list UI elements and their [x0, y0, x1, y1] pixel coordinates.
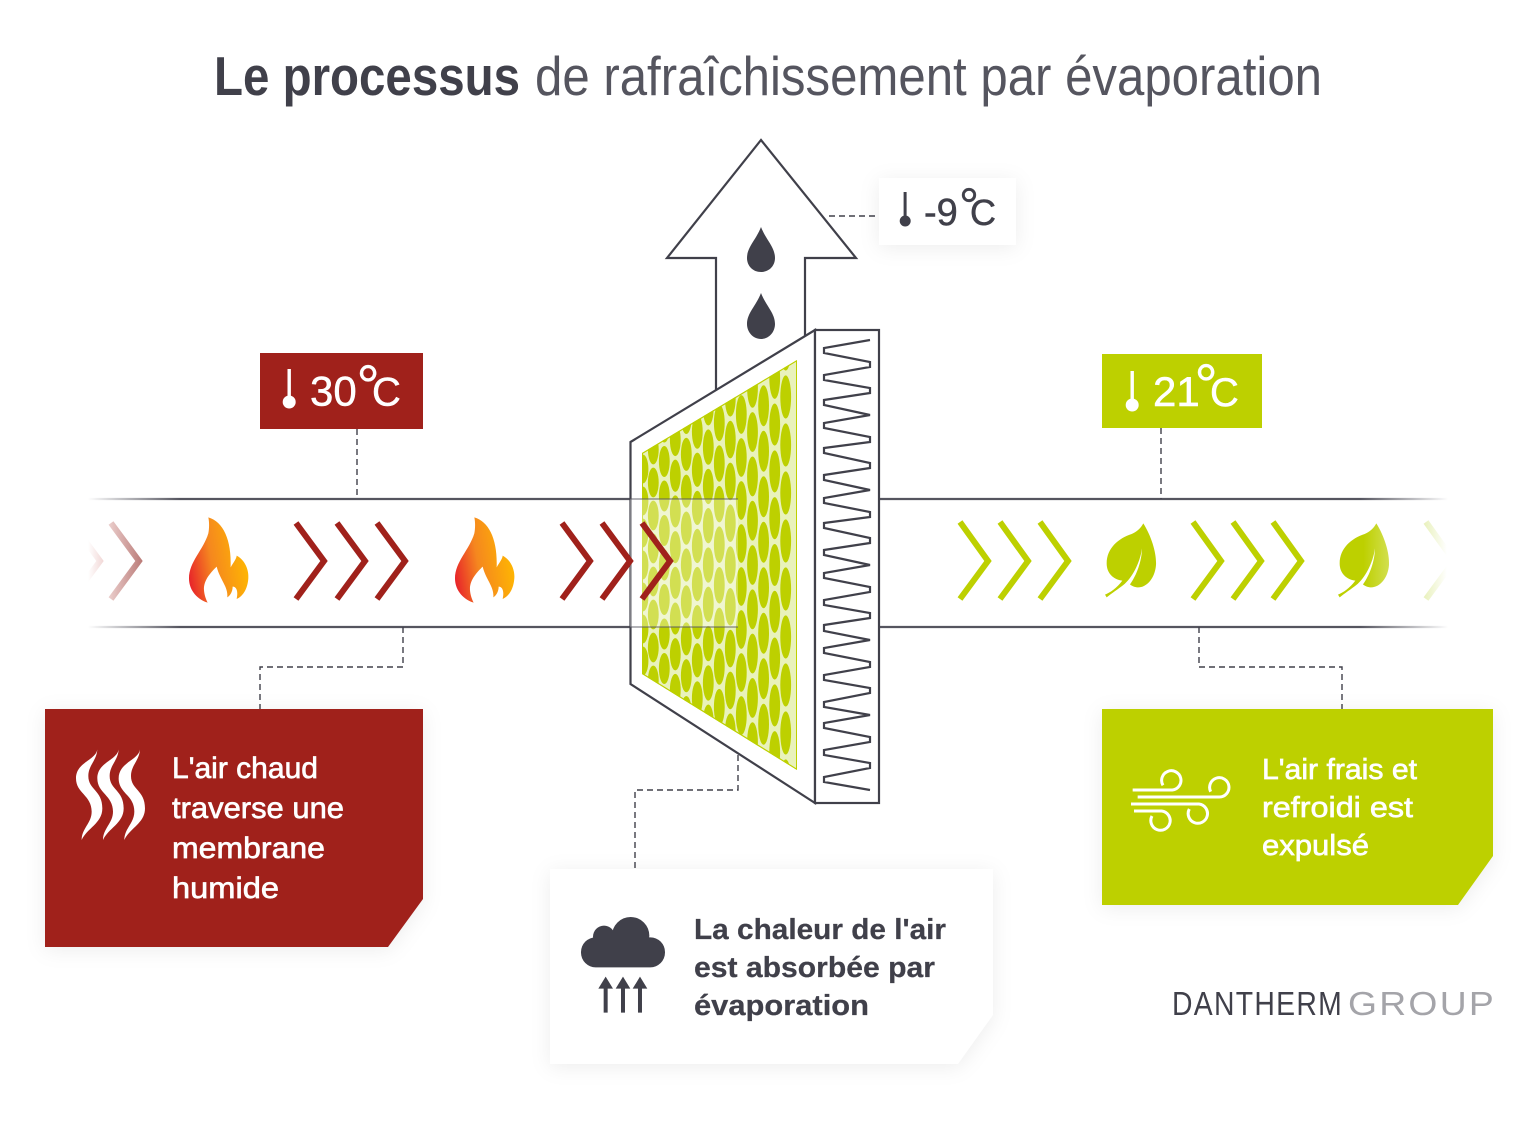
filter pleats [824, 340, 870, 790]
temperature value: C [970, 192, 996, 233]
air duct lines [88, 499, 1448, 627]
temperature value: ° [959, 178, 979, 234]
panel text: L'air chaud [172, 752, 318, 785]
temperature tag: 30°C [260, 353, 423, 429]
chevrons group 2 [562, 523, 670, 599]
hot air flow [72, 523, 670, 599]
icon: water drop lower [747, 293, 775, 339]
panel text [694, 914, 946, 1022]
panel: evaporation [550, 869, 993, 1064]
panel text [172, 752, 344, 905]
icon: flame 1 [189, 517, 248, 603]
panel text [1262, 754, 1417, 862]
panel text: évaporation [694, 990, 869, 1022]
faded chevron [1426, 522, 1454, 599]
title [214, 45, 1322, 107]
exhaust arrow [667, 140, 856, 400]
icon: cloud with rising arrows [581, 917, 665, 1013]
temperature value: C [372, 370, 401, 414]
chevrons group 2 [1193, 522, 1301, 599]
faded chevrons [72, 523, 139, 599]
temperature tag: -9°C [879, 178, 1016, 245]
icon: flame 2 [455, 517, 514, 603]
icon: thermometer [1126, 371, 1139, 412]
panel: hot air [45, 709, 423, 947]
temperature value: 30 [310, 368, 357, 414]
logo: Dantherm Group: GROUP [1348, 985, 1496, 1022]
panel text: traverse une [172, 792, 344, 825]
membrane frame [630, 330, 815, 803]
icon: wind [1131, 771, 1229, 830]
panel text: expulsé [1262, 830, 1369, 862]
logo: Dantherm Group [1172, 985, 1496, 1022]
connector dashes [260, 216, 1342, 869]
icon: leaf 2 [1338, 523, 1389, 597]
panel text: refroidi est [1262, 792, 1413, 824]
duct end mask [1447, 505, 1461, 620]
panel text: humide [172, 872, 279, 905]
title: de rafraîchissement par évaporation [535, 45, 1322, 107]
temperature value: -9 [924, 192, 958, 234]
filter box [815, 330, 879, 803]
honeycomb membrane [642, 360, 797, 770]
membrane unit [630, 310, 879, 820]
temperature tag: 21°C [1102, 353, 1262, 428]
icon: leaf 1 [1105, 523, 1156, 597]
temperature value: C [1210, 371, 1239, 415]
temperature value: 21 [1153, 368, 1200, 415]
panel text: L'air frais et [1262, 754, 1417, 786]
panel text: est absorbée par [694, 952, 935, 984]
icon: thermometer [900, 192, 911, 226]
temperature value: ° [1194, 353, 1218, 418]
temperature value: ° [356, 354, 380, 419]
logo: Dantherm Group: DANTHERM [1172, 985, 1343, 1022]
icon: water drop upper [747, 227, 775, 272]
title: Le processus [214, 45, 520, 107]
icon: steam [76, 748, 145, 840]
icon: thermometer [283, 369, 296, 408]
panel text: membrane [172, 832, 325, 865]
cool air flow [960, 522, 1454, 599]
chevrons group 1 [296, 523, 405, 599]
duct overlay [630, 499, 738, 627]
panel: cool air [1102, 709, 1493, 905]
panel text: La chaleur de l'air [694, 914, 946, 946]
chevrons group 1 [960, 522, 1068, 599]
